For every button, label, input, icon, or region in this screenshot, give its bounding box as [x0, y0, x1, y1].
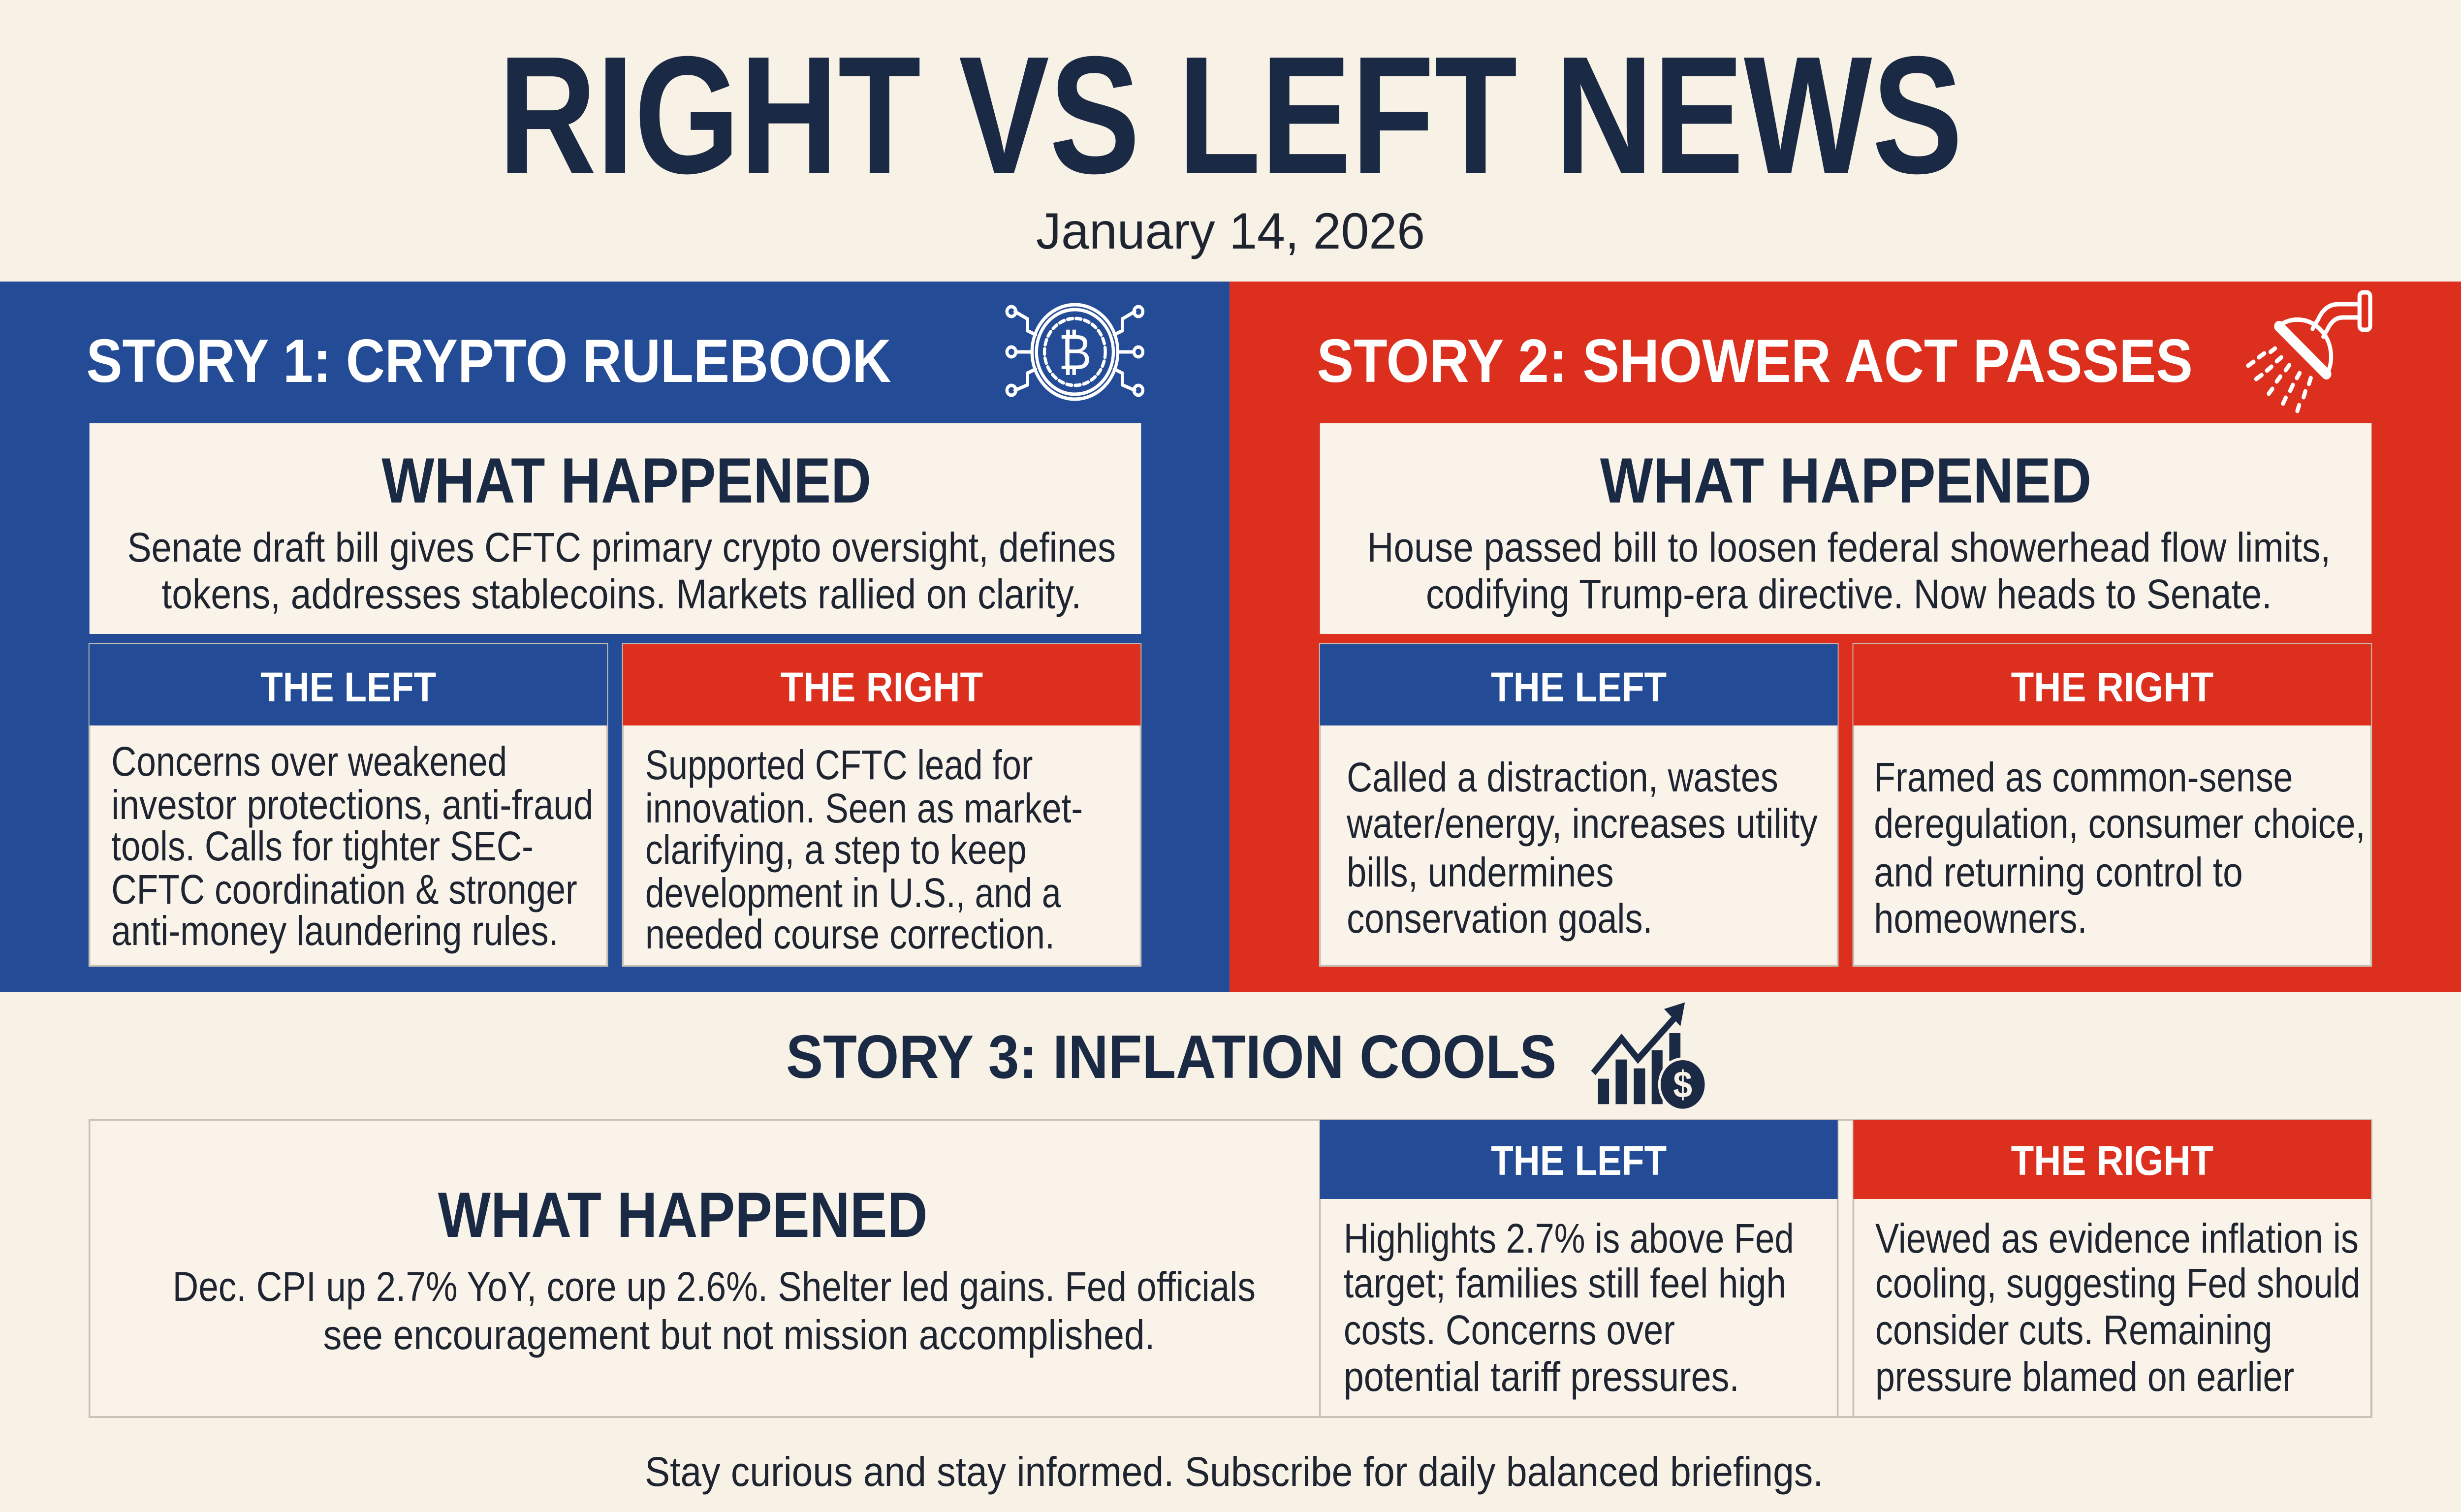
story 2 the right [1853, 644, 2371, 966]
story 3 the left: THE LEFT [1491, 1138, 1667, 1184]
what happened box 1: tokens, addresses stablecoins. Markets rallied on clarity. [161, 571, 1081, 618]
story 2 the right: Framed as common-sense [1874, 755, 2293, 801]
story 1 the left: investor protections, anti-fraud [111, 782, 593, 828]
story 2 the right: homeowners. [1874, 896, 2087, 942]
story 2 the right: and returning control to [1874, 850, 2243, 896]
what happened box 2 [1320, 423, 2371, 634]
date: January 14, 2026 [1036, 203, 1425, 260]
story 3 the left: target; families still feel high [1344, 1260, 1786, 1307]
story 3 the right: THE RIGHT [2011, 1138, 2213, 1184]
story 3 the left [1320, 1120, 1838, 1417]
footer: Stay curious and stay informed. Subscribe for daily balanced briefings. [645, 1449, 1824, 1495]
story 1 the right: clarifying, a step to keep [645, 827, 1027, 873]
icon: bitcoin circuit [1007, 305, 1143, 399]
story 3 the right: cooling, suggesting Fed should [1875, 1260, 2361, 1307]
panel: story 3 inflation [90, 1120, 2371, 1417]
story 3 the right: pressure blamed on earlier [1875, 1354, 2294, 1400]
story 1 the left: CFTC coordination & stronger [111, 867, 577, 913]
story 3 the right: consider cuts. Remaining [1875, 1307, 2272, 1354]
story 2 the left: conservation goals. [1347, 896, 1653, 942]
story 2 the left: Called a distraction, wastes [1347, 755, 1778, 801]
story 2 the left: bills, undermines [1347, 850, 1614, 896]
story 1 the left: Concerns over weakened [111, 739, 507, 785]
story 2 the right: deregulation, consumer choice, [1874, 801, 2366, 847]
what happened box 2: codifying Trump-era directive. Now heads to Senate. [1426, 571, 2272, 618]
story 1 the left: anti-money laundering rules. [111, 908, 559, 954]
panel: story 1 crypto [0, 282, 1230, 992]
icon: bitcoin circuit: ₿ [1058, 325, 1091, 380]
what happened box 2: House passed bill to loosen federal showerhead flow limits, [1367, 525, 2331, 571]
story 1 the right: development in U.S., and a [645, 870, 1061, 916]
story 3 the left: costs. Concerns over [1344, 1307, 1675, 1354]
icon: chart with dollar [1593, 1003, 1707, 1111]
story 3 heading: STORY 3: INFLATION COOLS [786, 1023, 1556, 1091]
story 1 the left: THE LEFT [260, 664, 436, 711]
what happened box 1: Senate draft bill gives CFTC primary crypto oversight, defines [127, 525, 1116, 571]
title: RIGHT VS LEFT NEWS [498, 21, 1963, 208]
what happened box 1 [90, 423, 1141, 634]
what happened 3 [173, 1180, 1256, 1358]
story 1 the left: tools. Calls for tighter SEC- [111, 823, 534, 870]
what happened 3: Dec. CPI up 2.7% YoY, core up 2.6%. Shelter led gains. Fed officials [173, 1264, 1256, 1310]
story 3 the left: Highlights 2.7% is above Fed [1344, 1216, 1794, 1262]
story 1 the left [90, 644, 607, 966]
what happened box 2: WHAT HAPPENED [1600, 445, 2091, 516]
story 2 the left: THE LEFT [1491, 664, 1667, 711]
story 1 the right: THE RIGHT [781, 664, 983, 711]
story 1 the right: Supported CFTC lead for [645, 742, 1033, 788]
story 2 heading: STORY 2: SHOWER ACT PASSES [1317, 327, 2193, 395]
story 1 the right: innovation. Seen as market- [645, 786, 1083, 832]
story 2 the left: water/energy, increases utility [1346, 801, 1818, 847]
story 3 the right [1853, 1120, 2371, 1417]
icon: chart with dollar: $ [1673, 1064, 1692, 1106]
story 3 the left: potential tariff pressures. [1344, 1354, 1739, 1400]
story 1 heading: STORY 1: CRYPTO RULEBOOK [86, 327, 891, 395]
what happened box 1: WHAT HAPPENED [381, 445, 871, 516]
story 1 the right [623, 644, 1140, 966]
panel: story 2 shower [1230, 282, 2461, 992]
icon: shower head [2248, 292, 2370, 411]
story 2 the right: THE RIGHT [2011, 664, 2213, 711]
story 1 the right: needed course correction. [645, 912, 1055, 958]
what happened 3: WHAT HAPPENED [438, 1180, 928, 1251]
story 3 the right: Viewed as evidence inflation is [1875, 1216, 2359, 1262]
story 2 the left [1320, 644, 1838, 966]
what happened 3: see encouragement but not mission accomplished. [323, 1312, 1155, 1358]
